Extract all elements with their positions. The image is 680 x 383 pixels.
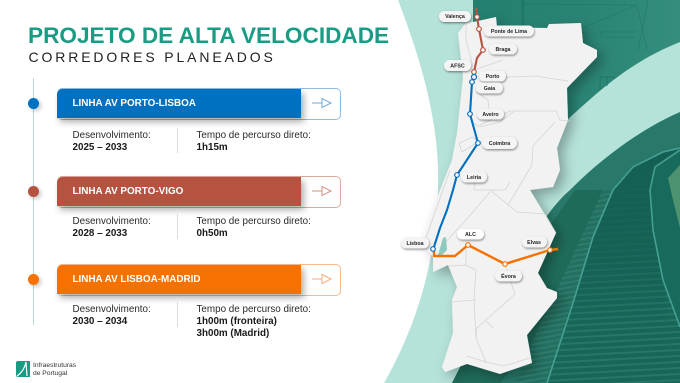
logo text xyxy=(33,362,76,377)
line: Porto-Vigo xyxy=(474,8,483,72)
panel: Linha AV Lisboa-Madrid: LINHA AV LISBOA-MADRID xyxy=(72,274,200,285)
text: development Porto-Lisboa: Desenvolvimento: xyxy=(72,130,151,141)
station labels: Porto xyxy=(486,74,500,80)
station labels: Elvas xyxy=(527,240,541,246)
upper photo: catenary xyxy=(473,0,680,190)
station labels: Aveiro xyxy=(482,112,499,118)
station labels: ALC xyxy=(465,232,476,238)
mint crescent xyxy=(384,0,680,383)
text: travel time Porto-Vigo: 0h50m xyxy=(196,228,228,239)
rails xyxy=(547,148,680,383)
icon: logo mark xyxy=(16,361,30,377)
text: development Porto-Vigo xyxy=(72,216,151,239)
timeline dot: Lisboa-Madrid xyxy=(28,274,39,285)
station labels: Évora xyxy=(501,272,516,280)
station labels: AFSC xyxy=(450,64,465,70)
station markers xyxy=(431,15,552,266)
track bed xyxy=(548,263,680,383)
icon: arrow orange xyxy=(312,274,332,284)
text: travel time Lisboa-Madrid: 3h00m (Madrid) xyxy=(196,328,269,339)
right side of track xyxy=(650,150,680,327)
station labels: Braga xyxy=(495,47,511,53)
station labels: Valença xyxy=(445,14,465,20)
icon: arrow blue xyxy=(312,98,332,108)
text: development Porto-Vigo: 2028 – 2033 xyxy=(72,228,127,239)
text: travel time Lisboa-Madrid: Tempo de percurso direto: xyxy=(196,304,311,315)
line: Lisboa-Madrid xyxy=(434,245,558,264)
station labels: Ponte de Lima xyxy=(491,29,527,35)
panel: Linha AV Porto-Vigo xyxy=(56,176,341,214)
lower photo: rail tracks xyxy=(440,100,680,383)
subtitle: CORREDORES PLANEADOS xyxy=(28,49,276,65)
text: development Porto-Vigo: Desenvolvimento: xyxy=(72,216,151,227)
conventional rail network xyxy=(426,23,570,366)
divider xyxy=(177,214,178,239)
logo text: de Portugal xyxy=(33,370,67,377)
text: development Lisboa-Madrid: Desenvolvimento: xyxy=(72,304,151,315)
station labels: Lisboa xyxy=(406,241,424,247)
timeline line xyxy=(33,78,34,325)
left sleeper ends xyxy=(515,190,613,383)
station labels: Coimbra xyxy=(489,141,510,147)
text: development Porto-Lisboa xyxy=(72,130,151,153)
text: travel time Porto-Lisboa: Tempo de percurso direto: xyxy=(196,130,311,141)
text: travel time Porto-Vigo xyxy=(196,216,311,239)
Lisbon estuary xyxy=(438,237,447,256)
divider xyxy=(177,302,178,327)
text: travel time Lisboa-Madrid xyxy=(196,304,311,339)
text: travel time Porto-Lisboa xyxy=(196,130,311,153)
timeline dot: Porto-Lisboa xyxy=(28,98,39,109)
text: development Lisboa-Madrid: 2030 – 2034 xyxy=(72,316,127,327)
station labels: Leiria xyxy=(467,175,481,181)
text: travel time Lisboa-Madrid: 1h00m (fronteira) xyxy=(196,316,277,327)
panel: Linha AV Porto-Lisboa xyxy=(56,88,341,126)
icon: arrow brick xyxy=(312,186,332,196)
station labels: Gaia xyxy=(484,86,495,92)
line: Porto-Lisboa xyxy=(433,77,478,250)
logo text: Infraestruturas xyxy=(33,362,76,369)
text: development Lisboa-Madrid xyxy=(72,304,151,327)
left ballast xyxy=(440,190,603,383)
title: PROJETO DE ALTA VELOCIDADE xyxy=(28,22,389,48)
background and railway map xyxy=(384,0,680,383)
panel: Linha AV Lisboa-Madrid xyxy=(56,264,341,302)
text: travel time Porto-Vigo: Tempo de percurso direto: xyxy=(196,216,311,227)
panel: Linha AV Porto-Vigo: LINHA AV PORTO-VIGO xyxy=(72,186,183,197)
panel: Linha AV Porto-Lisboa: LINHA AV PORTO-LISBOA xyxy=(72,98,196,109)
text: travel time Porto-Lisboa: 1h15m xyxy=(196,142,228,153)
map of Portugal xyxy=(401,8,597,374)
timeline dot: Porto-Vigo xyxy=(28,186,39,197)
text: development Porto-Lisboa: 2025 – 2033 xyxy=(72,142,127,153)
station labels xyxy=(401,11,547,282)
divider xyxy=(177,128,178,153)
logo: Infraestruturas de Portugal xyxy=(16,361,76,377)
